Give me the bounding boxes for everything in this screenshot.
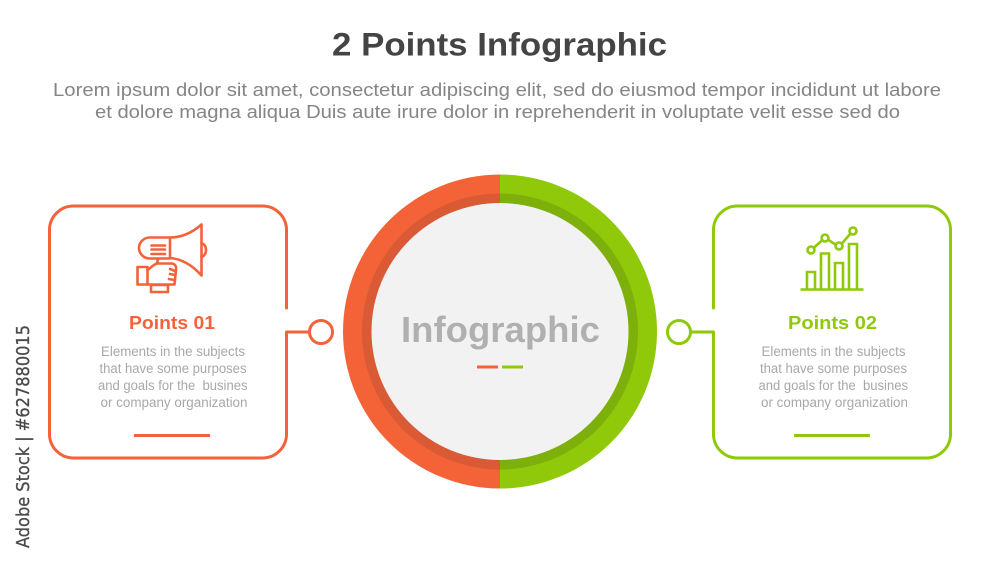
- body text: points 02: that have some purposes: [760, 361, 907, 376]
- underline: [134, 434, 210, 437]
- panel: points 01: [50, 206, 332, 458]
- subtitle text block: [53, 79, 941, 122]
- body text: points 02: [758, 344, 908, 410]
- title: 2 Points Infographic: [332, 26, 667, 62]
- subtitle text block: Lorem ipsum dolor sit amet, consectetur adipiscing elit, sed do eiusmod tempor incididunt ut labore: [53, 79, 941, 100]
- panel outline with connector: [668, 206, 950, 458]
- center label: Infographic: [401, 309, 600, 350]
- panel outline with connector: [50, 206, 332, 458]
- central circle: [343, 174, 657, 488]
- body text: points 01: [98, 344, 248, 410]
- heading: points 01: Points 01: [129, 313, 215, 333]
- body text: points 01: that have some purposes: [100, 361, 247, 376]
- body text: points 01: or company organization: [100, 395, 248, 410]
- icon: bar chart with trend line: [800, 228, 864, 290]
- body text: points 02: or company organization: [761, 395, 908, 410]
- body text: points 01: and goals for the busines: [98, 378, 248, 393]
- subtitle text block: et dolore magna aliqua Duis aute irure dolor in reprehenderit in voluptate velit esse sed do: [95, 101, 900, 122]
- center dashes: [477, 366, 523, 368]
- body text: points 02: Elements in the subjects: [762, 344, 906, 359]
- panel: points 02: [668, 206, 950, 458]
- icon: megaphone in hand: [138, 224, 206, 292]
- heading: points 02: Points 02: [788, 313, 877, 333]
- side credit text: Adobe Stock | #627880015: [14, 325, 34, 548]
- underline: [794, 434, 870, 437]
- body text: points 01: Elements in the subjects: [101, 344, 245, 359]
- body text: points 02: and goals for the busines: [758, 378, 908, 393]
